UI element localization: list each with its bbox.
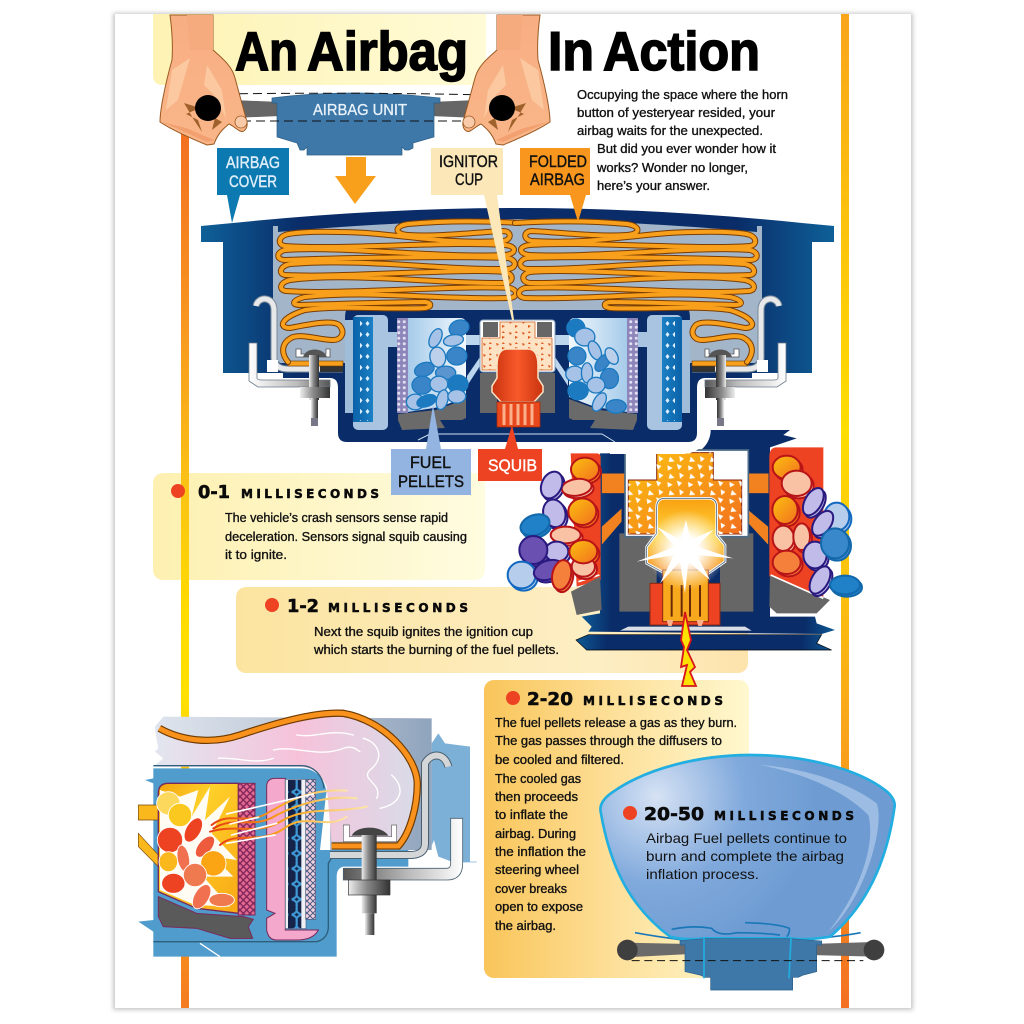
right blue backing bbox=[432, 733, 477, 862]
left vertical stripe bbox=[181, 130, 189, 1008]
step heading: 0-1 bbox=[198, 482, 230, 503]
squib bbox=[492, 349, 543, 427]
right hand bbox=[463, 15, 550, 145]
label: folded airbag bbox=[520, 148, 590, 222]
panel: 1-2 milliseconds bbox=[236, 587, 748, 673]
mounting bracket bbox=[256, 299, 343, 369]
label: ignitor cup bbox=[431, 148, 514, 320]
gray cavity bbox=[273, 219, 518, 363]
label: folded airbag: AIRBAG bbox=[530, 171, 585, 189]
airbag unit bbox=[680, 939, 822, 990]
pellets bbox=[508, 456, 862, 599]
page sheet bbox=[113, 13, 913, 1010]
gray core block bbox=[480, 373, 497, 413]
step heading bbox=[287, 596, 468, 617]
step text: the inflation the bbox=[495, 844, 586, 859]
gas chamber bbox=[408, 318, 466, 412]
step text: then proceeds bbox=[495, 789, 578, 804]
pink cooling channel bbox=[267, 778, 318, 940]
title bbox=[235, 20, 760, 82]
label: ignitor cup: CUP bbox=[455, 171, 483, 189]
filter bbox=[345, 315, 397, 430]
step heading: 20-50 bbox=[644, 804, 704, 825]
label: squib bbox=[478, 425, 542, 481]
blue housing bbox=[138, 768, 408, 957]
label: fuel pellets: PELLETS bbox=[398, 473, 464, 491]
connector stubs bbox=[138, 805, 158, 867]
step text: The gas passes through the diffusers to bbox=[495, 733, 722, 748]
step text bbox=[313, 624, 559, 657]
airbag unit bbox=[272, 93, 440, 155]
panel text: 0-1 milliseconds bbox=[171, 482, 467, 562]
gray center blocks bbox=[536, 373, 555, 413]
steering wheel with hands and airbag unit bbox=[160, 15, 550, 155]
red side panels bbox=[571, 453, 601, 587]
squib glowing bbox=[647, 498, 725, 626]
step text: be cooled and filtered. bbox=[495, 752, 624, 767]
fuel pellets right bbox=[566, 319, 626, 413]
step heading bbox=[644, 804, 854, 825]
housing bbox=[201, 208, 518, 442]
airbag bbox=[600, 755, 895, 939]
label: folded airbag: FOLDED bbox=[529, 153, 587, 171]
step text: inflation process. bbox=[646, 866, 759, 882]
wheel rim dashes bbox=[225, 93, 490, 121]
step text: burn and complete the airbag bbox=[646, 848, 844, 864]
step text: Airbag Fuel pellets continue to bbox=[646, 830, 847, 846]
step text: deceleration. Sensors signal squib causing bbox=[225, 529, 467, 544]
burning pellets bbox=[157, 792, 234, 912]
step marker bbox=[623, 806, 637, 820]
intro text bbox=[577, 87, 788, 193]
housing upper bbox=[153, 717, 432, 850]
intro text: airbag waits for the unexpected. bbox=[577, 123, 763, 138]
step text: which starts the burning of the fuel pellets. bbox=[313, 642, 559, 657]
step text bbox=[495, 715, 737, 933]
step heading: MILLISECONDS bbox=[241, 487, 379, 501]
label: airbag cover: COVER bbox=[229, 173, 277, 191]
ignitor cup bbox=[625, 450, 748, 537]
step text: Next the squib ignites the ignition cup bbox=[314, 624, 533, 639]
inflating bag fabric bbox=[159, 713, 417, 846]
flames and gas arrows bbox=[210, 790, 367, 845]
folded airbag bbox=[278, 221, 757, 362]
step text: the airbag. bbox=[495, 918, 556, 933]
step heading: MILLISECONDS bbox=[328, 601, 468, 615]
left hand bbox=[160, 15, 247, 145]
label: squib: SQUIB bbox=[488, 457, 537, 475]
panel: 2-20 milliseconds bbox=[484, 680, 749, 978]
arrow: downward bbox=[335, 157, 376, 204]
flaps behind bbox=[635, 933, 861, 940]
airbag unit: AIRBAG UNIT bbox=[313, 102, 407, 119]
title: In bbox=[548, 20, 594, 82]
label: airbag cover bbox=[217, 148, 289, 223]
step text: steering wheel bbox=[495, 862, 579, 877]
step heading: MILLISECONDS bbox=[714, 809, 854, 823]
step text bbox=[225, 510, 467, 562]
lower bracket bbox=[249, 343, 330, 387]
intro text: here’s your answer. bbox=[597, 178, 710, 193]
step text: cover breaks bbox=[495, 881, 567, 896]
title: Airbag bbox=[307, 20, 468, 82]
left half of assembly bbox=[201, 208, 518, 442]
step heading: MILLISECONDS bbox=[583, 694, 723, 708]
intro text: Occupying the space where the horn bbox=[577, 87, 788, 102]
folded bag strip bbox=[288, 361, 343, 366]
bolt bbox=[296, 349, 330, 426]
step heading: 1-2 bbox=[287, 596, 319, 617]
step marker bbox=[506, 691, 520, 705]
step heading bbox=[198, 482, 379, 503]
step heading bbox=[527, 689, 723, 710]
label: ignitor cup: IGNITOR bbox=[439, 153, 498, 171]
ignitor cup bbox=[480, 320, 555, 372]
step text: it to ignite. bbox=[225, 547, 287, 562]
chamber connectors bbox=[466, 335, 480, 386]
lightning bolt bbox=[681, 612, 696, 686]
title: An bbox=[235, 20, 298, 82]
right vertical stripe bbox=[841, 14, 849, 1008]
wheel spokes bbox=[627, 942, 873, 957]
step text: airbag. During bbox=[495, 826, 576, 841]
detail illustration: gas inflating the bag bbox=[138, 713, 477, 957]
label: airbag cover: AIRBAG bbox=[226, 154, 280, 172]
label: fuel pellets bbox=[391, 405, 471, 495]
gas swirls bbox=[218, 733, 400, 808]
diffuser hatch bbox=[397, 318, 408, 413]
step text: to inflate the bbox=[495, 807, 568, 822]
intro text: works? Wonder no longer, bbox=[596, 160, 748, 175]
base white gap bbox=[610, 380, 702, 448]
gas cloud bbox=[154, 715, 416, 842]
base highlight bbox=[418, 434, 615, 442]
white notch bbox=[408, 840, 452, 869]
step heading: 2-20 bbox=[527, 689, 573, 710]
step marker bbox=[265, 598, 279, 612]
intro text: But did you ever wonder how it bbox=[597, 141, 776, 156]
step text: open to expose bbox=[495, 899, 583, 914]
diffuser filter bbox=[285, 779, 316, 929]
airbag highlights bbox=[672, 765, 879, 937]
panel text: 20-50 milliseconds bbox=[623, 804, 854, 882]
connectors bbox=[602, 473, 769, 545]
gray blocks bbox=[571, 533, 830, 615]
bolt bbox=[343, 825, 397, 935]
step text: The vehicle’s crash sensors sense rapid bbox=[225, 510, 448, 525]
right half of assembly bbox=[517, 208, 834, 442]
title backing panel bbox=[153, 14, 486, 85]
burst bbox=[637, 510, 733, 593]
inflated airbag illustration bbox=[600, 755, 895, 990]
step text: The cooled gas bbox=[495, 771, 581, 786]
lower bracket bbox=[343, 818, 463, 880]
hook bracket bbox=[330, 756, 448, 855]
lower plate bbox=[576, 635, 832, 650]
gray seal bbox=[398, 399, 466, 430]
title: Action bbox=[603, 20, 760, 82]
step marker bbox=[171, 484, 185, 498]
intro text: button of yesteryear resided, your bbox=[577, 105, 776, 120]
fuel pellets left bbox=[406, 317, 471, 411]
step text: The fuel pellets release a gas as they burn. bbox=[495, 715, 737, 730]
housing bbox=[582, 430, 835, 634]
burn chamber bbox=[158, 783, 255, 938]
main cutaway diagram bbox=[201, 208, 834, 448]
label: fuel pellets: FUEL bbox=[410, 454, 451, 472]
step text bbox=[646, 830, 847, 882]
detail illustration: 1-2 ms ignition bbox=[508, 430, 862, 650]
panel background: 0-1 milliseconds bbox=[153, 473, 485, 580]
unit lines bbox=[704, 938, 791, 978]
steering wheel spokes bbox=[232, 100, 478, 118]
